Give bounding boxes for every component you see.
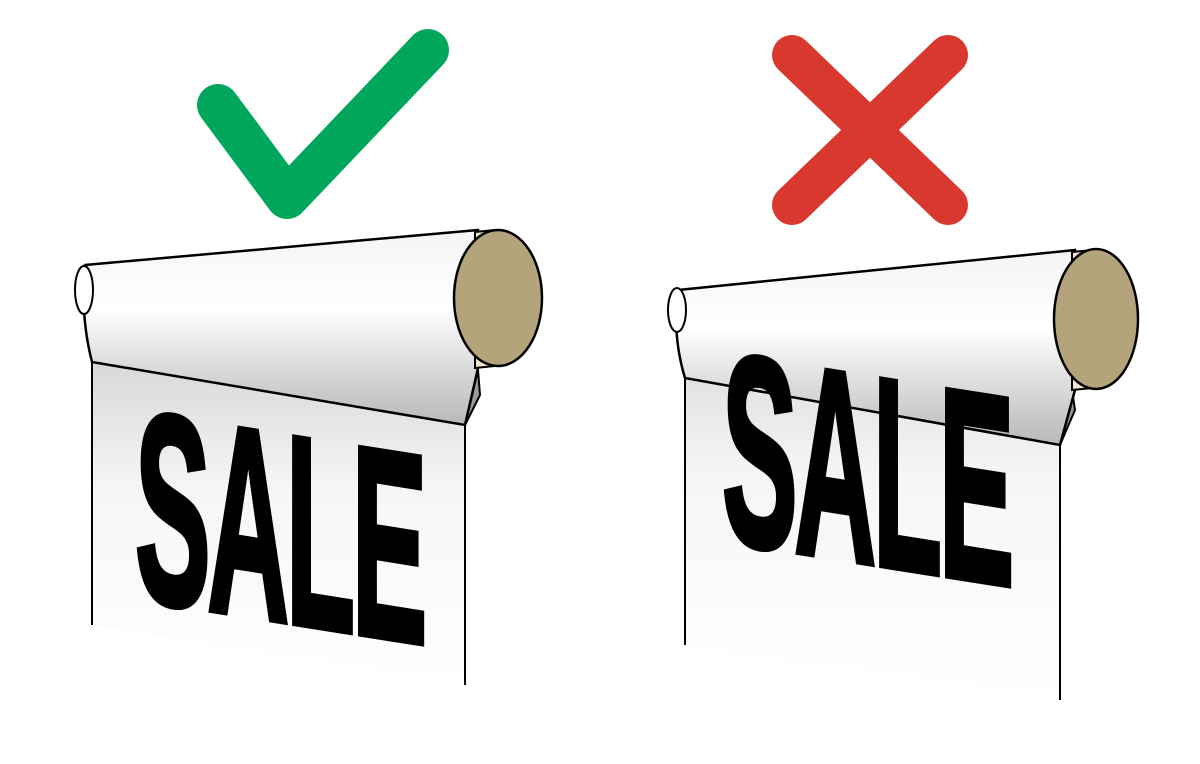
SALE text: SALE (135, 353, 424, 701)
panel: correct banner roll (75, 230, 542, 701)
panel: incorrect banner roll (668, 249, 1138, 700)
icon: red cross (792, 55, 948, 205)
SALE text (misaligned): SALE (722, 295, 1011, 643)
icon: green check mark (218, 50, 428, 198)
